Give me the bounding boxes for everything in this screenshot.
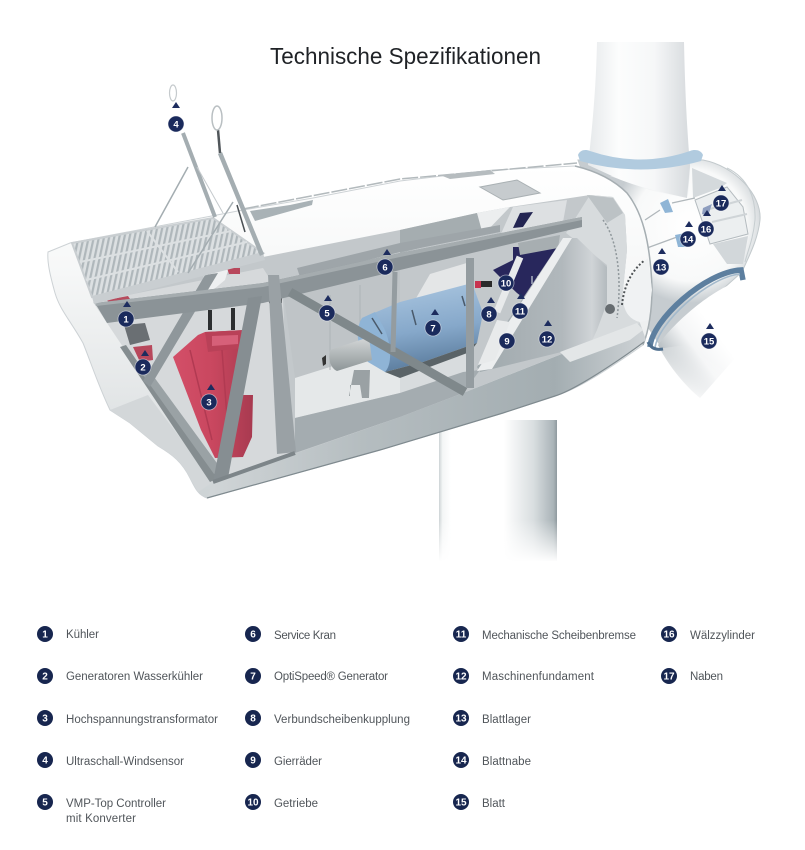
number markers on the drawing: 12 <box>542 334 552 346</box>
high-voltage transformer <box>173 308 253 458</box>
legend column 3: Blattlager <box>482 714 531 726</box>
number markers on the drawing: 10 <box>501 278 511 290</box>
legend column 1: 2 <box>42 672 48 682</box>
legend column 1: Kühler <box>66 629 99 641</box>
machine foundation <box>477 238 643 372</box>
gearbox <box>475 235 560 332</box>
title: Technische Spezifikationen <box>270 43 541 69</box>
legend column 1: Generatoren Wasserkühler <box>66 671 203 683</box>
illustration: wind turbine nacelle cutaway <box>48 42 790 576</box>
number markers on the drawing: 8 <box>486 310 492 320</box>
legend column 2: OptiSpeed® Generator <box>274 671 388 683</box>
legend column 3: 15 <box>455 798 467 808</box>
legend column 3: Blatt <box>482 798 506 810</box>
rotor blade <box>648 270 790 430</box>
number markers on the drawing: 14 <box>683 234 694 246</box>
legend column 3: 13 <box>455 714 467 724</box>
legend column 1: 4 <box>42 756 48 766</box>
wind sensor masts <box>155 85 262 273</box>
legend column 1: Hochspannungstransformator <box>66 714 218 726</box>
legend column 2: Gierräder <box>274 756 322 768</box>
legend column 3: Mechanische Scheibenbremse <box>482 630 636 642</box>
auxiliary cylinder on stand <box>322 337 372 398</box>
cooler and water cooler parts <box>107 268 282 362</box>
legend column 4: Naben <box>690 671 723 683</box>
legend column 2: 9 <box>250 756 256 766</box>
legend column 3: Maschinenfundament <box>482 671 595 683</box>
legend column 1: VMP-Top Controller <box>66 798 166 810</box>
legend column 4: 16 <box>663 630 675 640</box>
legend column 3: Blattnabe <box>482 756 531 768</box>
legend column 2: 8 <box>250 714 256 724</box>
steel frame beams <box>95 217 582 482</box>
railing and roof hatches <box>243 163 577 221</box>
OptiSpeed generator <box>358 283 483 378</box>
legend column 3: 11 <box>456 630 467 640</box>
legend column 2: Getriebe <box>274 798 318 810</box>
legend column 3: 14 <box>455 756 467 766</box>
legend column 1: 5 <box>42 798 48 808</box>
legend column 2: 10 <box>247 798 259 808</box>
legend column 2 <box>245 626 410 810</box>
number markers on the drawing: 7 <box>430 324 436 334</box>
number markers on the drawing: 13 <box>656 262 666 274</box>
legend column 3: 12 <box>455 672 467 682</box>
legend column 4 <box>661 626 755 684</box>
nacelle interior <box>93 195 640 482</box>
legend column 1: mit Konverter <box>66 813 136 825</box>
number markers on the drawing <box>118 102 729 410</box>
number markers on the drawing: 1 <box>123 314 129 326</box>
cone front and main shaft <box>566 195 652 345</box>
rotor hub <box>578 160 760 345</box>
legend column 1: 3 <box>42 714 48 724</box>
number markers on the drawing: 4 <box>173 120 179 130</box>
legend column 2: 6 <box>250 630 256 640</box>
number markers on the drawing: 11 <box>515 306 526 318</box>
lower tower <box>435 420 561 576</box>
legend column 1 <box>37 626 218 825</box>
number markers on the drawing: 9 <box>504 336 510 348</box>
legend column 4: 17 <box>663 672 675 682</box>
number markers on the drawing: 17 <box>716 198 726 210</box>
number markers on the drawing: 6 <box>382 262 388 274</box>
legend column 2: 7 <box>250 672 256 682</box>
nacelle shell <box>48 166 652 498</box>
number markers on the drawing: 3 <box>206 398 212 408</box>
number markers on the drawing: 2 <box>140 362 146 374</box>
grated platform <box>72 218 265 304</box>
number markers on the drawing: 16 <box>701 224 711 236</box>
number markers on the drawing: 15 <box>704 336 715 348</box>
number markers on the drawing: 5 <box>324 308 330 320</box>
legend <box>37 626 755 825</box>
upper tower with blue ring <box>578 42 703 198</box>
legend column 1: Ultraschall-Windsensor <box>66 756 184 768</box>
legend column 4: Wälzzylinder <box>690 630 755 642</box>
legend column 2: Service Kran <box>274 630 336 642</box>
legend column 3 <box>453 626 636 810</box>
legend column 2: Verbundscheibenkupplung <box>274 714 410 726</box>
legend column 1: 1 <box>42 630 48 640</box>
